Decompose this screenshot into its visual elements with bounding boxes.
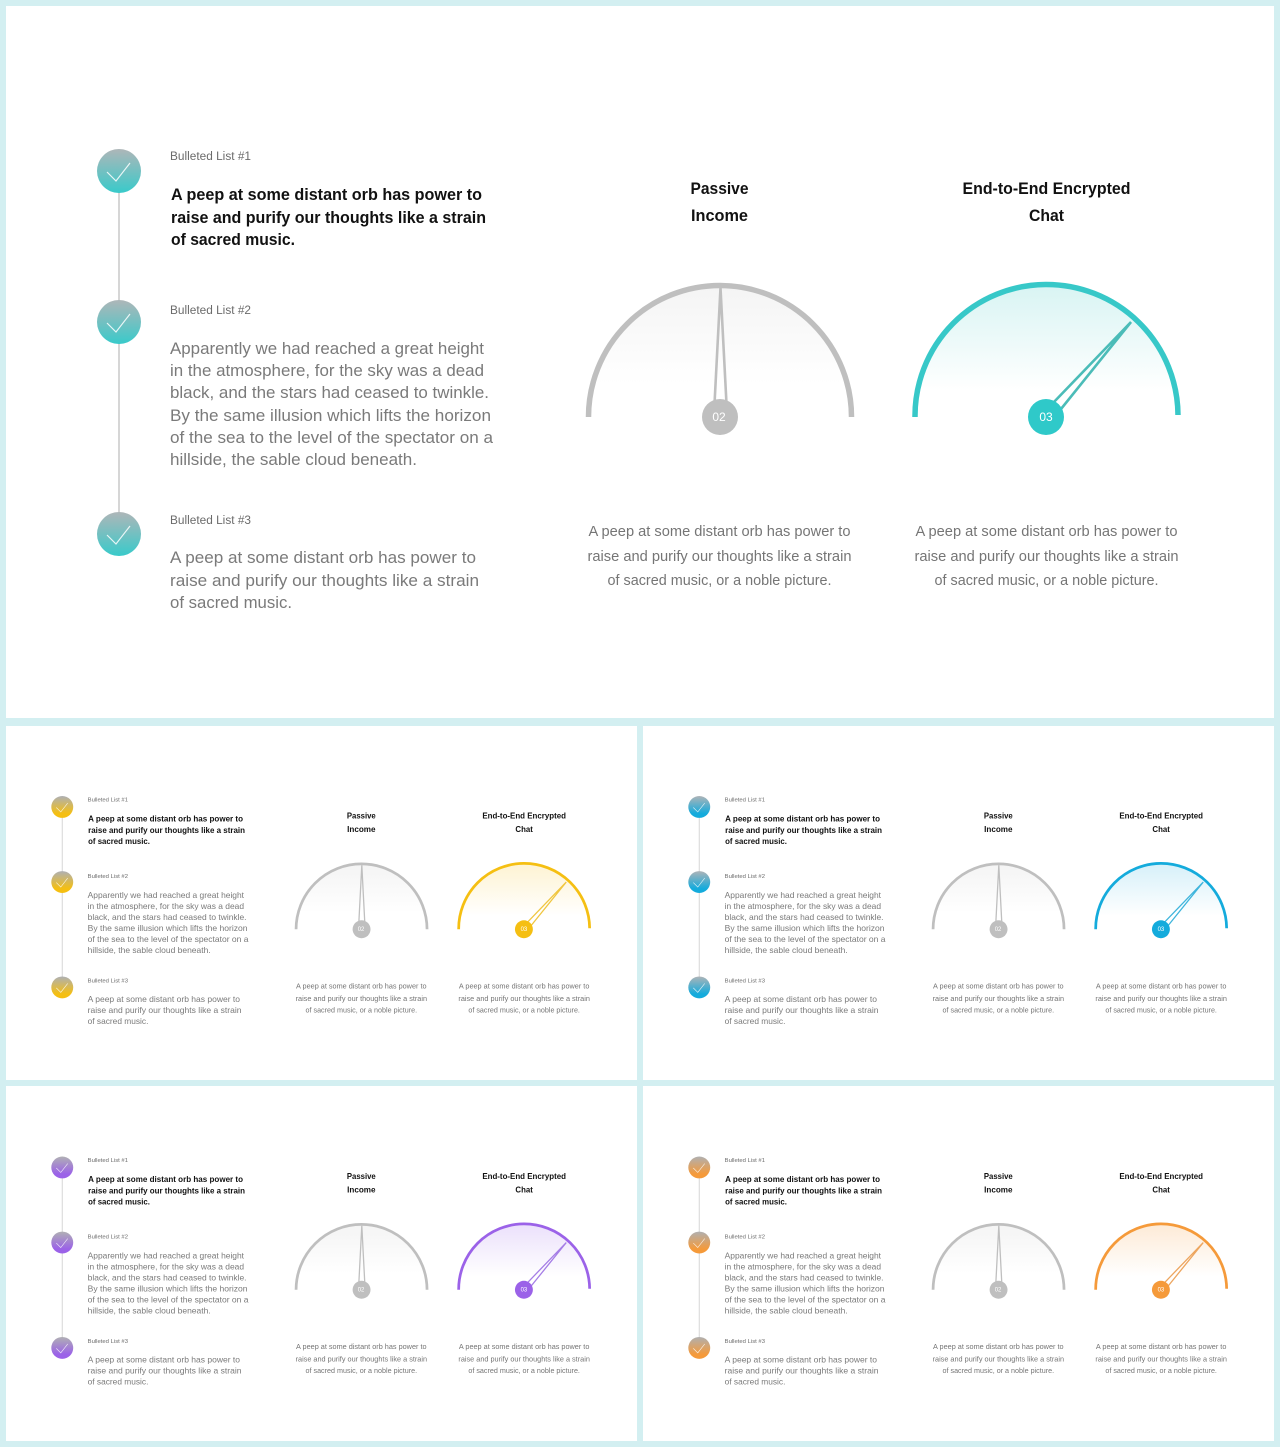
gauge: blue 03: Chat [1152,824,1170,834]
list text: raise and purify our thoughts like a strain [725,1185,882,1195]
heading: End-to-End Encrypted Chat: End-to-End Encrypted [962,179,1130,198]
text block 2: By the same illusion which lifts the horizon [170,406,491,425]
list text [88,1158,249,1387]
icon: check bullet 2 [97,300,141,344]
gauge: grey 02: of sacred music, or a noble picture. [306,1006,417,1015]
list label 2: Bulleted List #2 [170,305,251,317]
description 2 [914,523,1178,589]
list text: raise and purify our thoughts like a strain [725,1005,879,1015]
text block 2: of the sea to the level of the spectator on a [170,428,494,447]
panel: blue slide [643,726,1274,1080]
list text: of the sea to the level of the spectator on a [725,934,886,944]
gauge: grey 02: of sacred music, or a noble picture. [943,1006,1054,1015]
gauge: orange 03: 03 [1158,1288,1165,1294]
description 1: A peep at some distant orb has power to [588,523,850,540]
description 2: A peep at some distant orb has power to [916,523,1178,540]
gauge: blue 03: 03 [1158,927,1165,933]
list text: raise and purify our thoughts like a strain [88,1366,242,1376]
bold text block: raise and purify our thoughts like a strain [171,208,486,227]
heading: End-to-End Encrypted Chat: Chat [1029,206,1064,225]
gauge: grey 02: Passive [984,1171,1013,1181]
list text: of the sea to the level of the spectator on a [88,1295,249,1305]
gauge: yellow 03 [458,810,590,1015]
icon: check bullet 1 [97,149,141,193]
panel: purple slide [6,1086,637,1441]
text block 3: raise and purify our thoughts like a strain [170,571,479,590]
gauge: grey 02: Income [984,1184,1013,1194]
list text: Apparently we had reached a great height [725,1250,882,1260]
gauge: grey 02 [296,810,427,1015]
gauge: yellow 03: raise and purify our thoughts like a strain [458,994,590,1003]
list text: raise and purify our thoughts like a strain [725,1366,879,1376]
gauge: grey 02: A peep at some distant orb has power to [933,981,1064,990]
list text: raise and purify our thoughts like a strain [88,1005,242,1015]
text block 2: in the atmosphere, for the sky was a dead [170,361,484,380]
list text: hillside, the sable cloud beneath. [725,945,848,955]
gauge: purple 03 [458,1171,590,1375]
list text: Bulleted List #3 [88,978,128,984]
text block 3 [170,548,479,612]
list text: Bulleted List #2 [725,1235,765,1241]
list text: of sacred music. [88,1377,148,1387]
description 1: of sacred music, or a noble picture. [608,572,832,589]
list text: of sacred music. [725,836,787,846]
gauge: orange 03: A peep at some distant orb has power to [1096,1342,1226,1351]
list text: black, and the stars had ceased to twinkle. [725,1272,884,1282]
gauge: orange 03: raise and purify our thoughts like a strain [1095,1354,1227,1363]
gauge: grey 02 [933,810,1064,1015]
gauge: purple 03: of sacred music, or a noble picture. [468,1366,580,1375]
list text: Bulleted List #3 [88,1339,128,1345]
list text: A peep at some distant orb has power to [725,1174,880,1184]
gauge: purple 03: 03 [521,1288,528,1294]
gauge: yellow 03: 03 [521,927,528,933]
text block 3: of sacred music. [170,593,292,612]
gauge: grey 02: 02 [712,410,726,424]
gauge: grey 02: A peep at some distant orb has power to [933,1342,1064,1351]
list text: raise and purify our thoughts like a strain [88,825,245,835]
gauge: teal 03 [915,284,1178,435]
list text: of the sea to the level of the spectator on a [88,934,249,944]
list text: Bulleted List #3 [725,1339,765,1345]
list text: hillside, the sable cloud beneath. [88,1306,211,1316]
bulleted list timeline [97,149,141,556]
gauge: yellow 03: of sacred music, or a noble picture. [468,1006,580,1015]
list text: A peep at some distant orb has power to [88,1354,240,1364]
list text: A peep at some distant orb has power to [725,994,877,1004]
gauge: purple 03: raise and purify our thoughts like a strain [458,1354,590,1363]
list text: black, and the stars had ceased to twinkle. [725,912,884,922]
description 2: of sacred music, or a noble picture. [934,572,1158,589]
gauge: orange 03: End-to-End Encrypted [1119,1171,1203,1181]
bulleted list timeline [51,796,73,998]
list text: in the atmosphere, for the sky was a dead [88,1261,244,1271]
list text: in the atmosphere, for the sky was a dead [725,901,881,911]
list label 1: Bulleted List #1 [170,151,251,163]
list text: raise and purify our thoughts like a strain [725,825,882,835]
list text: A peep at some distant orb has power to [88,1174,243,1184]
bulleted list timeline [51,1157,73,1359]
list text: Bulleted List #3 [725,978,765,984]
list text: A peep at some distant orb has power to [88,813,243,823]
gauge: grey 02: of sacred music, or a noble picture. [306,1366,417,1375]
text block 2: hillside, the sable cloud beneath. [170,450,417,469]
list text: of sacred music. [88,1016,148,1026]
text block 2: black, and the stars had ceased to twinkle. [170,383,489,402]
list text: Bulleted List #1 [88,798,128,804]
list text: in the atmosphere, for the sky was a dead [725,1261,881,1271]
panel: yellow slide [6,726,637,1080]
gauge: grey 02: of sacred music, or a noble picture. [943,1366,1054,1375]
list text: of sacred music. [725,1196,787,1206]
list text: hillside, the sable cloud beneath. [88,945,211,955]
list text: By the same illusion which lifts the horizon [725,923,885,933]
list text: hillside, the sable cloud beneath. [725,1306,848,1316]
gauge: blue 03: A peep at some distant orb has power to [1096,981,1226,990]
bulleted list timeline [688,1157,710,1359]
bold text block [171,185,486,249]
text block 2: Apparently we had reached a great height [170,339,484,358]
gauge: blue 03: of sacred music, or a noble picture. [1105,1006,1217,1015]
gauge: grey 02: A peep at some distant orb has power to [296,1342,427,1351]
list text: Bulleted List #1 [725,798,765,804]
gauge: grey 02: raise and purify our thoughts like a strain [933,1354,1064,1363]
gauge: yellow 03: A peep at some distant orb has power to [459,981,589,990]
list text: Bulleted List #2 [725,874,765,880]
gauge: grey 02 [933,1171,1064,1375]
gauge: grey 02: 02 [995,1288,1002,1294]
list text: of sacred music. [725,1016,785,1026]
list text: Bulleted List #1 [725,1158,765,1164]
gauge: blue 03: raise and purify our thoughts like a strain [1095,994,1227,1003]
gauge: purple 03: End-to-End Encrypted [482,1171,566,1181]
list text: A peep at some distant orb has power to [725,813,880,823]
gauge: grey 02 [296,1171,427,1375]
gauge: grey 02: raise and purify our thoughts like a strain [296,994,427,1003]
gauge: grey 02 [588,285,852,435]
list text: of sacred music. [88,836,150,846]
gauge: grey 02: Passive [347,1171,376,1181]
list text: A peep at some distant orb has power to [88,994,240,1004]
heading: Passive Income [690,179,748,225]
gauge: grey 02: 02 [358,1288,365,1294]
bold text block: A peep at some distant orb has power to [171,185,482,204]
list text [88,798,249,1026]
gauge: grey 02: Income [347,1184,376,1194]
list text: Apparently we had reached a great height [88,1250,245,1260]
list text: of the sea to the level of the spectator on a [725,1295,886,1305]
gauge: grey 02: raise and purify our thoughts like a strain [933,994,1064,1003]
text block 2 [170,339,494,469]
list text: Apparently we had reached a great height [725,890,882,900]
panel: large teal slide [6,6,1274,718]
gauge: grey 02: 02 [995,927,1002,933]
list text: in the atmosphere, for the sky was a dead [88,901,244,911]
list text: By the same illusion which lifts the horizon [725,1284,885,1294]
heading: Passive Income: Income [691,206,748,225]
gauge: blue 03: End-to-End Encrypted [1119,810,1203,820]
gauge: blue 03 [1095,810,1227,1015]
list text [725,798,886,1026]
list text: Bulleted List #2 [88,874,128,880]
gauge: grey 02: Passive [347,810,376,820]
gauge: yellow 03: Chat [515,824,533,834]
list text: of sacred music. [88,1196,150,1206]
heading: End-to-End Encrypted Chat [962,179,1130,225]
list text: Apparently we had reached a great height [88,890,245,900]
gauge: orange 03: Chat [1152,1184,1170,1194]
list text [725,1158,886,1387]
gauge: grey 02: Income [984,824,1013,834]
list label 3: Bulleted List #3 [170,515,251,527]
bold text block: of sacred music. [171,230,295,249]
list text: Bulleted List #1 [88,1158,128,1164]
text block 3: A peep at some distant orb has power to [170,548,476,567]
gauge: grey 02: Passive [984,810,1013,820]
gauge: grey 02: 02 [358,927,365,933]
gauge: grey 02: Income [347,824,376,834]
list text: black, and the stars had ceased to twinkle. [88,1272,247,1282]
list text: raise and purify our thoughts like a strain [88,1185,245,1195]
heading: Passive Income: Passive [690,179,748,198]
description 1: raise and purify our thoughts like a strain [588,548,852,565]
list text: A peep at some distant orb has power to [725,1354,877,1364]
gauge: purple 03: Chat [515,1184,533,1194]
gauge: grey 02: A peep at some distant orb has power to [296,981,427,990]
list text: By the same illusion which lifts the horizon [88,1284,248,1294]
gauge: orange 03: of sacred music, or a noble picture. [1105,1366,1217,1375]
description 2: raise and purify our thoughts like a strain [914,548,1178,565]
list text: of sacred music. [725,1377,785,1387]
gauge: yellow 03: End-to-End Encrypted [482,810,566,820]
panel: orange slide [643,1086,1274,1441]
gauge: grey 02: raise and purify our thoughts like a strain [296,1354,427,1363]
gauge: purple 03: A peep at some distant orb has power to [459,1342,589,1351]
gauge: orange 03 [1095,1171,1227,1375]
description 1 [588,523,852,589]
gauge: teal 03: 03 [1039,410,1053,424]
list text: By the same illusion which lifts the horizon [88,923,248,933]
icon: check bullet 3 [97,512,141,556]
list text: Bulleted List #2 [88,1235,128,1241]
list text: black, and the stars had ceased to twinkle. [88,912,247,922]
bulleted list timeline [688,796,710,998]
